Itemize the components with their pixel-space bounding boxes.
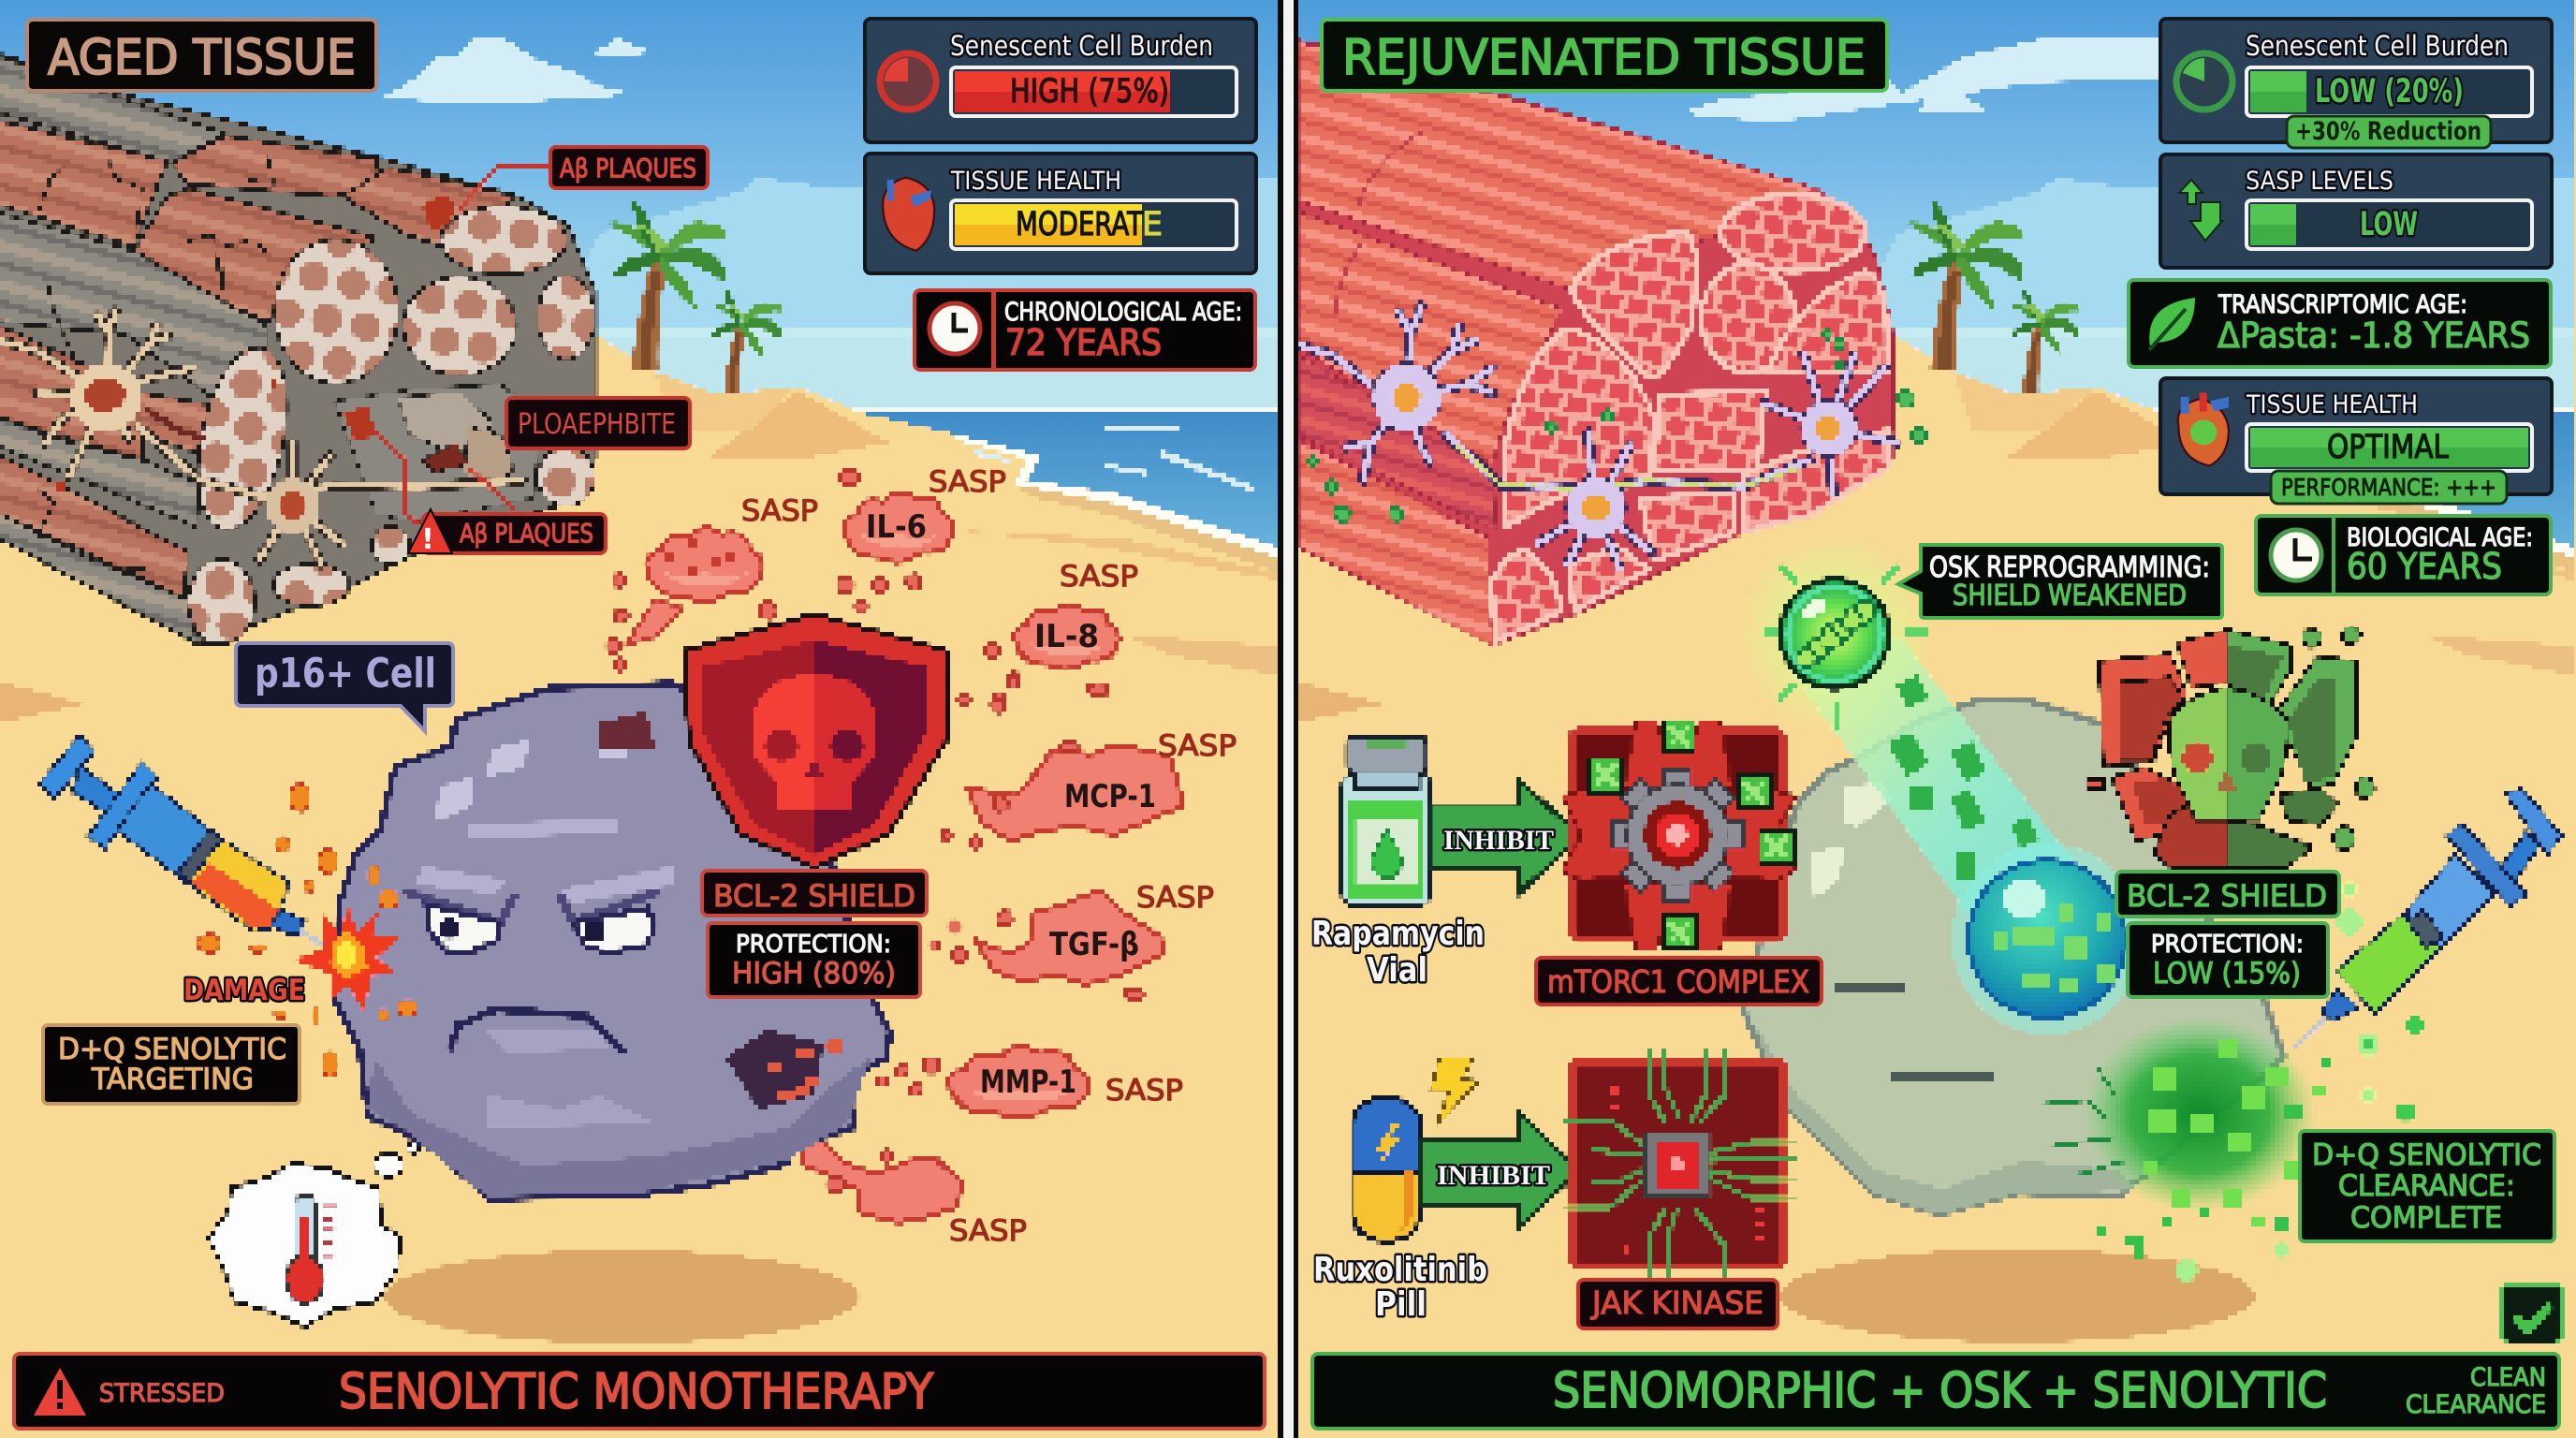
panel: D+Q clearance bbox=[2300, 1131, 2554, 1241]
plaque clusters bbox=[54, 195, 456, 492]
bar: moderate bbox=[951, 200, 1237, 249]
green inhibitor squares bbox=[1589, 721, 1793, 949]
panel: tissue health moderate bbox=[865, 154, 1256, 273]
panel: D+Q clearance: CLEARANCE: bbox=[2338, 1169, 2515, 1203]
check mark bbox=[2516, 1305, 2550, 1329]
damage burst bbox=[198, 785, 417, 1078]
panel: protection low: PROTECTION: bbox=[2151, 931, 2304, 959]
label: SASP 3: SASP bbox=[1060, 560, 1138, 594]
label: ruxolitinib pill bbox=[1313, 1251, 1487, 1324]
mTORC1 complex bbox=[1561, 721, 1795, 950]
label: mTORC1 complex: mTORC1 COMPLEX bbox=[1547, 963, 1809, 1000]
panel: chronological age: 72 YEARS bbox=[1005, 322, 1162, 363]
panel: tissue health optimal bbox=[2160, 378, 2552, 504]
callout: garbled plaque label bbox=[506, 398, 690, 448]
panel: senescent burden low: Senescent Cell Burden bbox=[2246, 30, 2509, 62]
panel: biological age bbox=[2256, 516, 2551, 594]
title: aged tissue: AGED TISSUE bbox=[48, 30, 356, 86]
droplets bbox=[607, 471, 1143, 1192]
label: IL-6: IL-6 bbox=[866, 508, 927, 546]
cloud: MMP-1 bbox=[948, 1047, 1090, 1118]
cloud: lower SASP bbox=[789, 1110, 964, 1223]
cloud: IL-8 bbox=[1014, 604, 1120, 669]
bar: low 20%: LOW (20%) bbox=[2315, 73, 2464, 110]
cell brows bbox=[404, 891, 660, 922]
panel: SASP levels bbox=[2160, 154, 2552, 268]
label: JAK kinase: JAK KINASE bbox=[1590, 1284, 1764, 1321]
closed eye right bbox=[1893, 1073, 1994, 1079]
panel: SASP levels: SASP LEVELS bbox=[2246, 167, 2393, 196]
status bar: senolytic monotherapy: SENOLYTIC MONOTHERAPY bbox=[339, 1364, 933, 1420]
panel: D+Q clearance: D+Q SENOLYTIC bbox=[2312, 1138, 2541, 1172]
cloud: MCP-1 bbox=[967, 744, 1184, 841]
label: SASP 4: SASP bbox=[1158, 729, 1237, 763]
label: inhibit 1: INHIBIT bbox=[1443, 825, 1554, 856]
icon: clock bbox=[929, 303, 980, 354]
shadow under cell: rejuvenated bbox=[1779, 1249, 2255, 1343]
panel: chronological age bbox=[915, 290, 1255, 370]
label: SASP 1: SASP bbox=[741, 494, 818, 528]
cracks bbox=[37, 154, 273, 585]
bar: high 75% bbox=[951, 67, 1237, 116]
callout: OSK reprogramming: OSK REPROGRAMMING: bbox=[1929, 551, 2210, 584]
icon: leaf bbox=[2149, 298, 2195, 350]
damaged zone bbox=[334, 385, 539, 522]
panel: senescent burden high bbox=[865, 19, 1256, 142]
panel: transcriptomic age bbox=[2129, 280, 2551, 367]
nanoparticle orb bbox=[1969, 860, 2126, 1018]
neurons: rejuvenated bbox=[1298, 305, 1897, 568]
spots on cytokine blob bbox=[665, 538, 735, 574]
rejuvenated cell body bbox=[1743, 700, 2284, 1214]
callout: OSK reprogramming: SHIELD WEAKENED bbox=[1953, 580, 2187, 612]
scene: right beach bbox=[1298, 0, 2576, 1438]
icon: pie high bbox=[880, 53, 936, 110]
bar: low bbox=[2247, 200, 2532, 249]
cloud: TGF-beta bbox=[975, 889, 1163, 985]
callout: garbled plaque label: PLOAEPHBITE bbox=[518, 408, 676, 441]
status bar: combination therapy: CLEAN bbox=[2470, 1363, 2546, 1392]
thought cloud with thermometer bbox=[209, 1143, 418, 1327]
clouds left bbox=[384, 37, 653, 105]
label: inhibit 2: INHIBIT bbox=[1437, 1160, 1550, 1191]
neurons: aged bbox=[0, 312, 522, 565]
checkbox art bbox=[2502, 1285, 2562, 1343]
panel: chronological age: CHRONOLOGICAL AGE: bbox=[1004, 298, 1242, 327]
OSK beam bbox=[1736, 536, 2143, 1034]
senescent cell body bbox=[334, 683, 890, 1198]
cell wound: bottom bbox=[725, 1030, 824, 1109]
ruxolitinib pill and bolt bbox=[1353, 1058, 1479, 1241]
muscle bundle: rejuvenated bbox=[1298, 39, 1926, 646]
panel: biological age: BIOLOGICAL AGE: bbox=[2347, 523, 2533, 552]
trail: cytokine blob bbox=[625, 599, 683, 646]
status bar: combination therapy: SENOMORPHIC + OSK + SENOLYTIC bbox=[1553, 1363, 2327, 1419]
icon: heart healed bbox=[2178, 392, 2229, 466]
cloud: IL-6 bbox=[843, 492, 953, 562]
rapamycin vial bbox=[1342, 736, 1430, 904]
BCL-2 shield: intact bbox=[684, 614, 946, 868]
callout: plaques top: Aβ PLAQUES bbox=[560, 153, 696, 183]
shadow under cell: aged bbox=[384, 1250, 859, 1343]
label: MMP-1: MMP-1 bbox=[980, 1064, 1076, 1101]
panel: transcriptomic age: TRANSCRIPTOMIC AGE: bbox=[2217, 290, 2467, 319]
regeneration particles bbox=[1309, 330, 1926, 521]
label: BCL-2 shield left: BCL-2 SHIELD bbox=[713, 878, 915, 914]
panel: D+Q targeting: D+Q SENOLYTIC bbox=[58, 1033, 286, 1066]
status bar: senolytic monotherapy: STRESSED bbox=[99, 1379, 225, 1408]
panel: protection low bbox=[2128, 923, 2328, 997]
callout: p16+ cell bbox=[236, 643, 453, 731]
callout: plaques warning bbox=[408, 509, 606, 556]
bar: high 75%: HIGH (75%) bbox=[1010, 73, 1169, 110]
cell wound: top bbox=[599, 712, 655, 749]
fascicle ends: aged bbox=[183, 206, 594, 644]
callout: OSK reprogramming bbox=[1898, 545, 2222, 618]
status bar: combination therapy: CLEARANCE bbox=[2406, 1390, 2546, 1419]
bar: optimal: OPTIMAL bbox=[2327, 429, 2449, 466]
syringe: D+Q right bbox=[2291, 788, 2562, 1050]
clouds right bbox=[1690, 39, 2172, 122]
label: SASP 2: SASP bbox=[929, 465, 1006, 499]
icon: heart bbox=[883, 178, 934, 251]
fascicle ends: rejuvenated bbox=[1491, 195, 1890, 641]
panel: D+Q targeting: TARGETING bbox=[91, 1063, 254, 1096]
muscle bundle: aged bbox=[0, 54, 595, 646]
icon: arrows bbox=[2179, 180, 2222, 241]
cell eye: left bbox=[426, 904, 501, 953]
label: damage: DAMAGE bbox=[183, 974, 305, 1007]
callout: plaques warning: ! bbox=[421, 523, 434, 556]
label: Senescent Cell Burden bbox=[950, 30, 1213, 62]
cell eye: right bbox=[573, 908, 655, 953]
label: BCL-2 shield right: BCL-2 SHIELD bbox=[2127, 878, 2327, 914]
plaque leader lines bbox=[376, 165, 552, 524]
label: SASP 7: SASP bbox=[949, 1214, 1027, 1248]
panel: D+Q clearance: COMPLETE bbox=[2350, 1201, 2502, 1235]
icon: warning bbox=[34, 1368, 86, 1416]
icon: clock bbox=[2271, 530, 2321, 580]
label: ruxolitinib pill: Pill bbox=[1375, 1285, 1427, 1324]
label: rapamycin vial bbox=[1311, 915, 1485, 990]
SASP puffs and droplets bbox=[607, 471, 1184, 1223]
callout: p16+ cell: p16+ Cell bbox=[255, 650, 436, 697]
label: SASP 6: SASP bbox=[1105, 1074, 1183, 1108]
panel: senescent burden low bbox=[2160, 19, 2552, 148]
scene: left beach bbox=[0, 0, 1278, 1438]
panel: tissue health optimal: TISSUE HEALTH bbox=[2246, 390, 2418, 419]
callout: plaques top bbox=[550, 147, 708, 188]
cloud: cytokine blob bbox=[646, 528, 763, 602]
title: rejuvenated tissue: REJUVENATED TISSUE bbox=[1342, 30, 1866, 86]
label: ruxolitinib pill: Ruxolitinib bbox=[1313, 1251, 1487, 1289]
label: IL-8: IL-8 bbox=[1034, 618, 1099, 655]
callout: plaques warning: Aβ PLAQUES bbox=[460, 518, 593, 549]
panel: biological age: 60 YEARS bbox=[2347, 546, 2502, 587]
label: SASP 5: SASP bbox=[1136, 881, 1214, 915]
label: TGF-beta: TGF-β bbox=[1049, 926, 1139, 963]
inhibit arrow: rapamycin bbox=[1432, 778, 1580, 895]
label: rapamycin vial: Vial bbox=[1367, 951, 1427, 990]
syringe: D+Q left bbox=[39, 736, 347, 961]
bar: low 20% bbox=[2247, 67, 2532, 116]
green burst on cell bbox=[2041, 882, 2423, 1282]
bar: low: LOW bbox=[2360, 206, 2418, 243]
panel: transcriptomic age: ΔPasta: -1.8 YEARS bbox=[2217, 315, 2530, 356]
label: JAK kinase bbox=[1578, 1280, 1778, 1328]
panel: protection high: PROTECTION: bbox=[736, 931, 891, 959]
panel: D+Q targeting bbox=[43, 1025, 300, 1104]
panel: protection low: LOW (15%) bbox=[2153, 957, 2301, 990]
panel: protection high bbox=[708, 923, 920, 997]
badge: reduction: +30% Reduction bbox=[2295, 117, 2481, 146]
panel: protection high: HIGH (80%) bbox=[732, 957, 896, 990]
status bar: combination therapy bbox=[1312, 1354, 2559, 1429]
inhibit arrow: ruxolitinib bbox=[1421, 1112, 1580, 1229]
label: rapamycin vial: Rapamycin bbox=[1311, 915, 1485, 953]
BCL-2 shield: shattered bbox=[2086, 626, 2375, 868]
divider bbox=[1278, 0, 1298, 1438]
badge: performance: PERFORMANCE: +++ bbox=[2281, 474, 2496, 501]
bar: moderate: E bbox=[1142, 206, 1163, 243]
icon: pie low bbox=[2176, 53, 2232, 110]
label: MCP-1: MCP-1 bbox=[1064, 778, 1156, 815]
JAK kinase chip bbox=[1561, 1049, 1799, 1278]
label: TISSUE HEALTH bbox=[950, 167, 1121, 196]
DNA sphere bbox=[1780, 580, 1889, 688]
status bar: senolytic monotherapy bbox=[14, 1354, 1265, 1429]
bar: moderate: MODERAT bbox=[1016, 206, 1143, 243]
closed eye left bbox=[1835, 983, 1907, 990]
bar: optimal bbox=[2247, 424, 2532, 471]
cell mouth bbox=[449, 1009, 624, 1053]
